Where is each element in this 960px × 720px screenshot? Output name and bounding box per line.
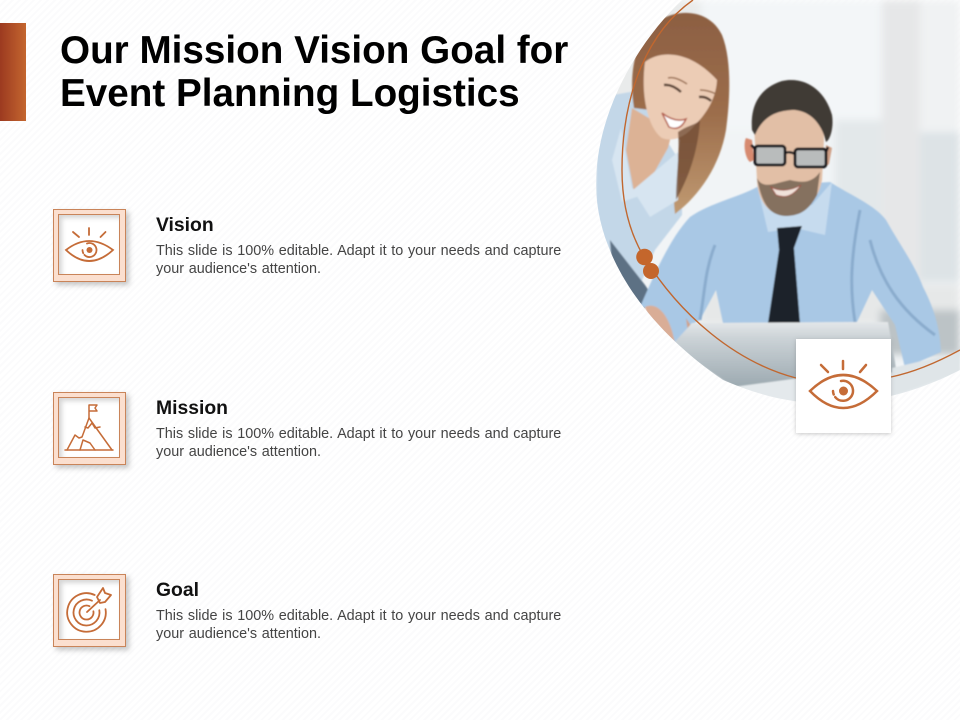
text: vision: Vision [156, 215, 214, 236]
card: white eye icon [796, 339, 891, 433]
text: goal: This slide is 100% editable. Adapt it to your needs and capture [156, 608, 561, 624]
title [60, 29, 568, 115]
photo: two colleagues in circle with orange arc [596, 0, 960, 402]
title: Event Planning Logistics [60, 72, 520, 115]
orange arc with dots [622, 0, 960, 378]
icon: vision eye box [53, 209, 126, 282]
woman [596, 13, 729, 310]
icon: mission mountain box [53, 392, 126, 465]
text: mission: This slide is 100% editable. Adapt it to your needs and capture [156, 426, 561, 442]
text: goal: Goal [156, 580, 199, 601]
text: goal [156, 580, 561, 642]
text: vision: your audience's attention. [156, 261, 321, 277]
text: mission [156, 398, 561, 460]
photo background [596, 0, 960, 366]
icon: goal target box [53, 574, 126, 647]
icon: large eye [808, 360, 879, 410]
text: mission: Mission [156, 398, 228, 419]
accent bar [0, 23, 26, 121]
laptop and desk [675, 321, 896, 387]
text: goal: your audience's attention. [156, 626, 321, 642]
title: Our Mission Vision Goal for [60, 29, 568, 72]
text: vision: This slide is 100% editable. Adapt it to your needs and capture [156, 243, 561, 259]
man [640, 80, 941, 368]
text: mission: your audience's attention. [156, 444, 321, 460]
text: vision [156, 215, 561, 277]
